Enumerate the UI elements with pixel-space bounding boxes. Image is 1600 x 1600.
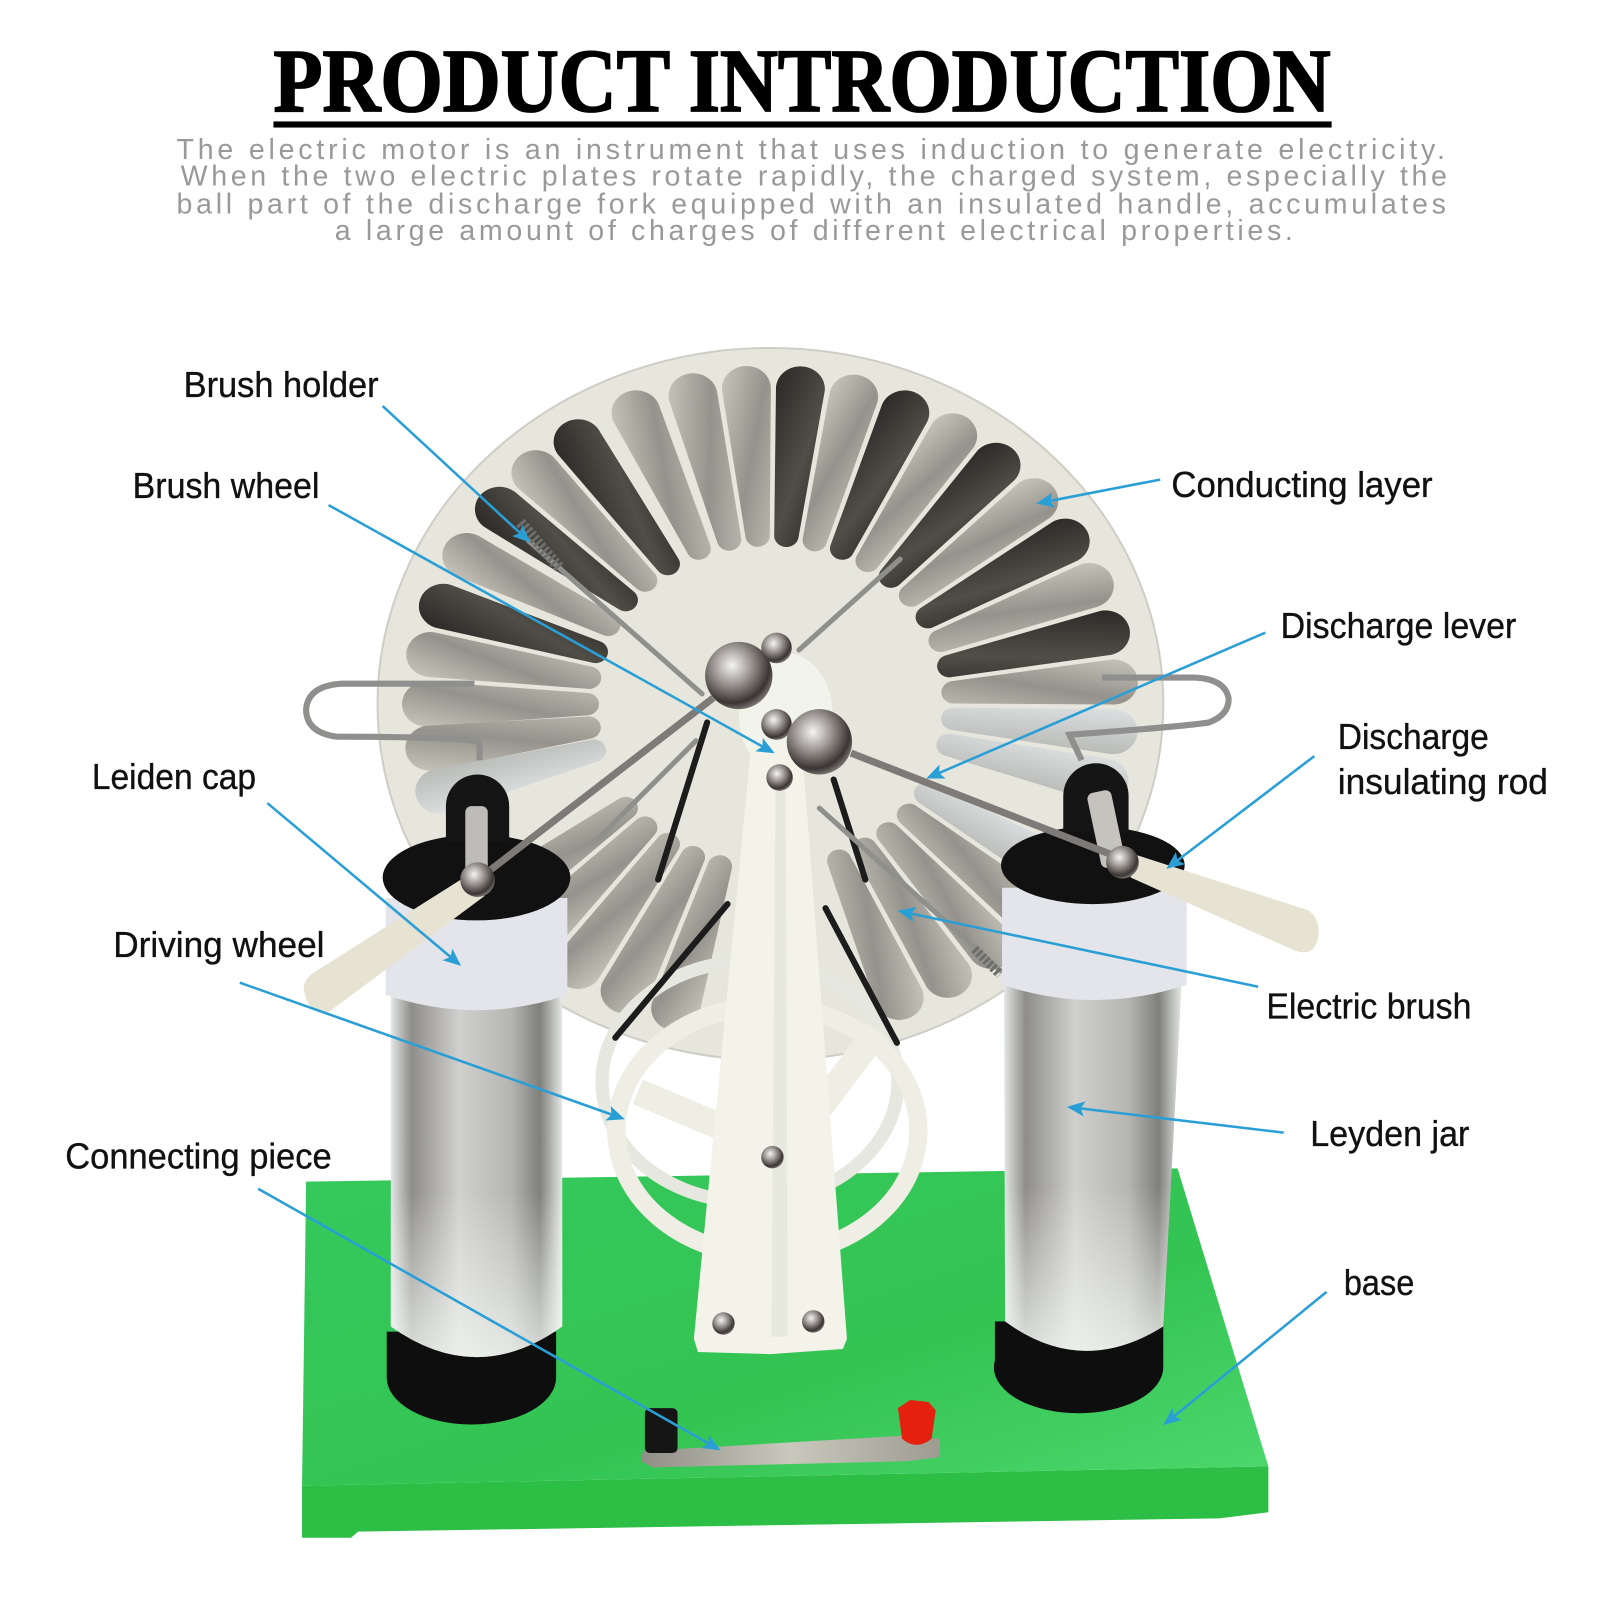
label: Connecting piece: Connecting piece (65, 1136, 332, 1176)
intro text: a large amount of charges of different electrical properties. (335, 215, 1293, 247)
label: Discharge insulating rod: Discharge (1338, 717, 1489, 757)
intro text: The electric motor is an instrument that uses induction to generate electricity. (177, 134, 1445, 166)
label: base: base (1344, 1263, 1414, 1303)
title underline (273, 121, 1332, 128)
label: base (1165, 1263, 1414, 1423)
discharge rods (490, 698, 1115, 870)
right Leyden jar (994, 827, 1187, 1413)
label: Leiden cap: Leiden cap (92, 757, 256, 797)
hub (739, 653, 833, 776)
arrow (383, 406, 529, 541)
conducting layer petals (402, 364, 1140, 1036)
brush rods and belts (520, 522, 1000, 1043)
brush spring lower (974, 949, 1000, 974)
label: Discharge insulating rod: insulating rod (1338, 762, 1548, 802)
label: Leyden jar (1069, 1107, 1469, 1154)
label: Electric brush: Electric brush (1266, 986, 1471, 1026)
label: Leiden cap (92, 757, 459, 964)
arrow (929, 633, 1265, 778)
label: Brush wheel (133, 466, 772, 752)
right knob (1063, 763, 1129, 869)
label: Electric brush (900, 911, 1471, 1026)
left knob (446, 775, 509, 878)
arrow (329, 505, 772, 752)
arrow (267, 803, 459, 964)
arrow (258, 1189, 718, 1449)
label: Discharge lever: Discharge lever (1281, 606, 1516, 646)
label: Discharge insulating rod (1168, 717, 1548, 867)
title: PRODUCT INTRODUCTION (273, 32, 1331, 131)
right fork hook (1069, 678, 1229, 760)
support stand (694, 747, 847, 1354)
arrow (1039, 480, 1160, 503)
connecting piece (641, 1400, 940, 1467)
label: Connecting piece (65, 1136, 718, 1449)
label: Driving wheel (113, 925, 622, 1118)
left fork hook (306, 684, 480, 760)
arrow (1165, 1292, 1327, 1423)
label: Discharge lever (929, 606, 1516, 778)
label: Driving wheel: Driving wheel (113, 925, 324, 965)
intro text: ball part of the discharge fork equipped with an insulated handle, accumulates (177, 188, 1446, 220)
stand screws (712, 1312, 735, 1335)
left Leyden jar (383, 835, 570, 1424)
label: Brush wheel: Brush wheel (133, 466, 319, 506)
balls (460, 633, 1139, 897)
intro text (177, 134, 1447, 247)
intro text: When the two electric plates rotate rapidly, the charged system, especially the (181, 161, 1447, 193)
arrow (1069, 1107, 1284, 1133)
label: Brush holder: Brush holder (184, 365, 379, 405)
label: Leyden jar: Leyden jar (1310, 1114, 1469, 1154)
base (302, 1168, 1268, 1538)
arrow (900, 911, 1258, 987)
brush spring upper (520, 522, 559, 567)
product: Wimshurst machine (302, 348, 1319, 1538)
label: Conducting layer: Conducting layer (1171, 465, 1433, 505)
left insulating handle (304, 876, 485, 1013)
arrow (240, 983, 622, 1118)
arrow (1168, 756, 1314, 867)
label: Brush holder (184, 365, 529, 541)
right insulating handle (1131, 855, 1319, 952)
label: Conducting layer (1039, 465, 1433, 505)
driving wheel (602, 961, 918, 1255)
disc (378, 348, 1163, 1060)
